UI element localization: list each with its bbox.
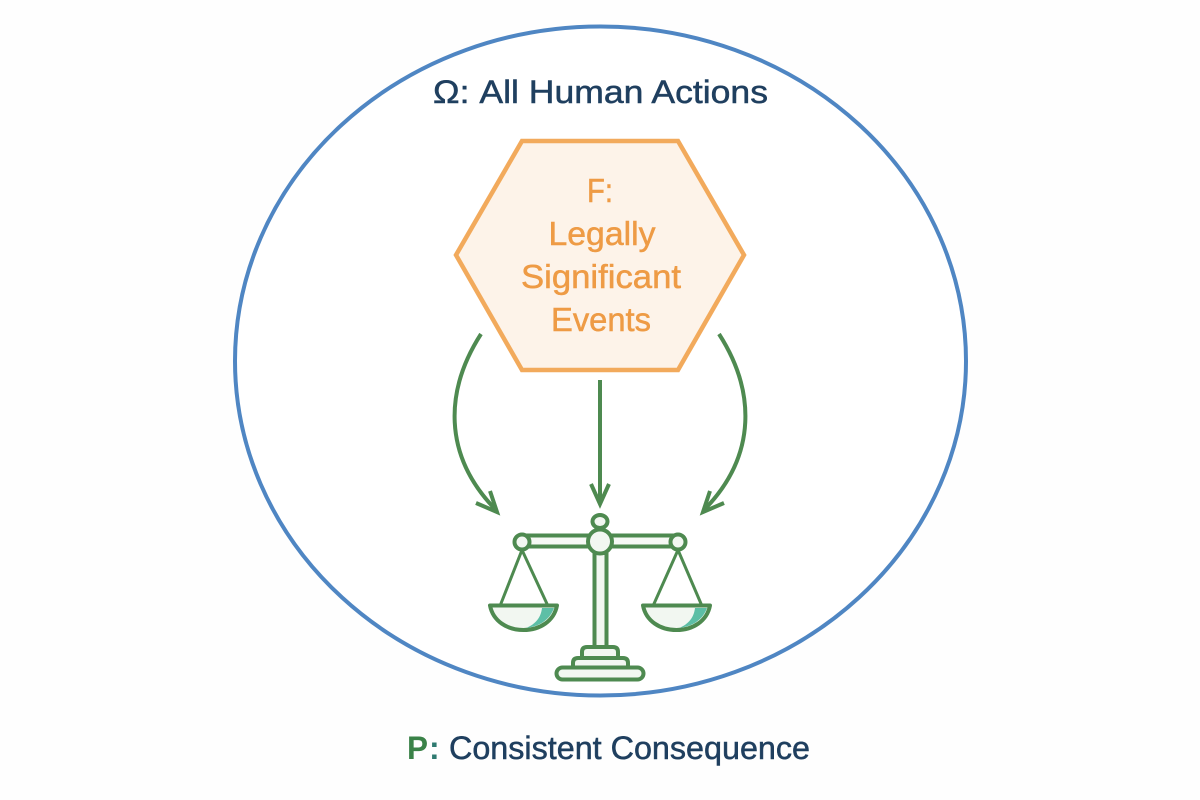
hexagon label: Significant (521, 258, 681, 295)
arrow: left curved (455, 334, 497, 512)
scale beam (524, 536, 676, 546)
scale centre pivot (588, 530, 612, 554)
icon: scales of justice (490, 515, 710, 680)
hexagon label: Events (551, 301, 651, 338)
hexagon label (521, 172, 681, 338)
arrow: center straight (591, 380, 609, 504)
left pan (490, 606, 557, 630)
scale top knob (592, 515, 608, 528)
heading: omega all human actions: Ω: All Human Actions (433, 74, 768, 110)
caption: P consistent consequence: Consistent Consequence (449, 730, 810, 766)
left pan strings (500, 550, 548, 606)
hexagon label: Legally (548, 215, 656, 252)
right pan (643, 606, 710, 630)
base tier middle (573, 658, 628, 668)
base tier top (582, 647, 618, 658)
outer circle: all human actions (235, 26, 966, 696)
base tier bottom (556, 668, 644, 680)
hexagon label: F: (587, 172, 613, 209)
left pivot (514, 534, 530, 550)
hexagon: legally significant events (456, 141, 744, 370)
caption: P consistent consequence: P (407, 730, 428, 766)
scale column (594, 553, 606, 649)
right pan strings (653, 550, 702, 606)
caption: P consistent consequence: : (429, 730, 440, 766)
right pivot (670, 534, 686, 550)
arrow: right curved (703, 334, 745, 512)
